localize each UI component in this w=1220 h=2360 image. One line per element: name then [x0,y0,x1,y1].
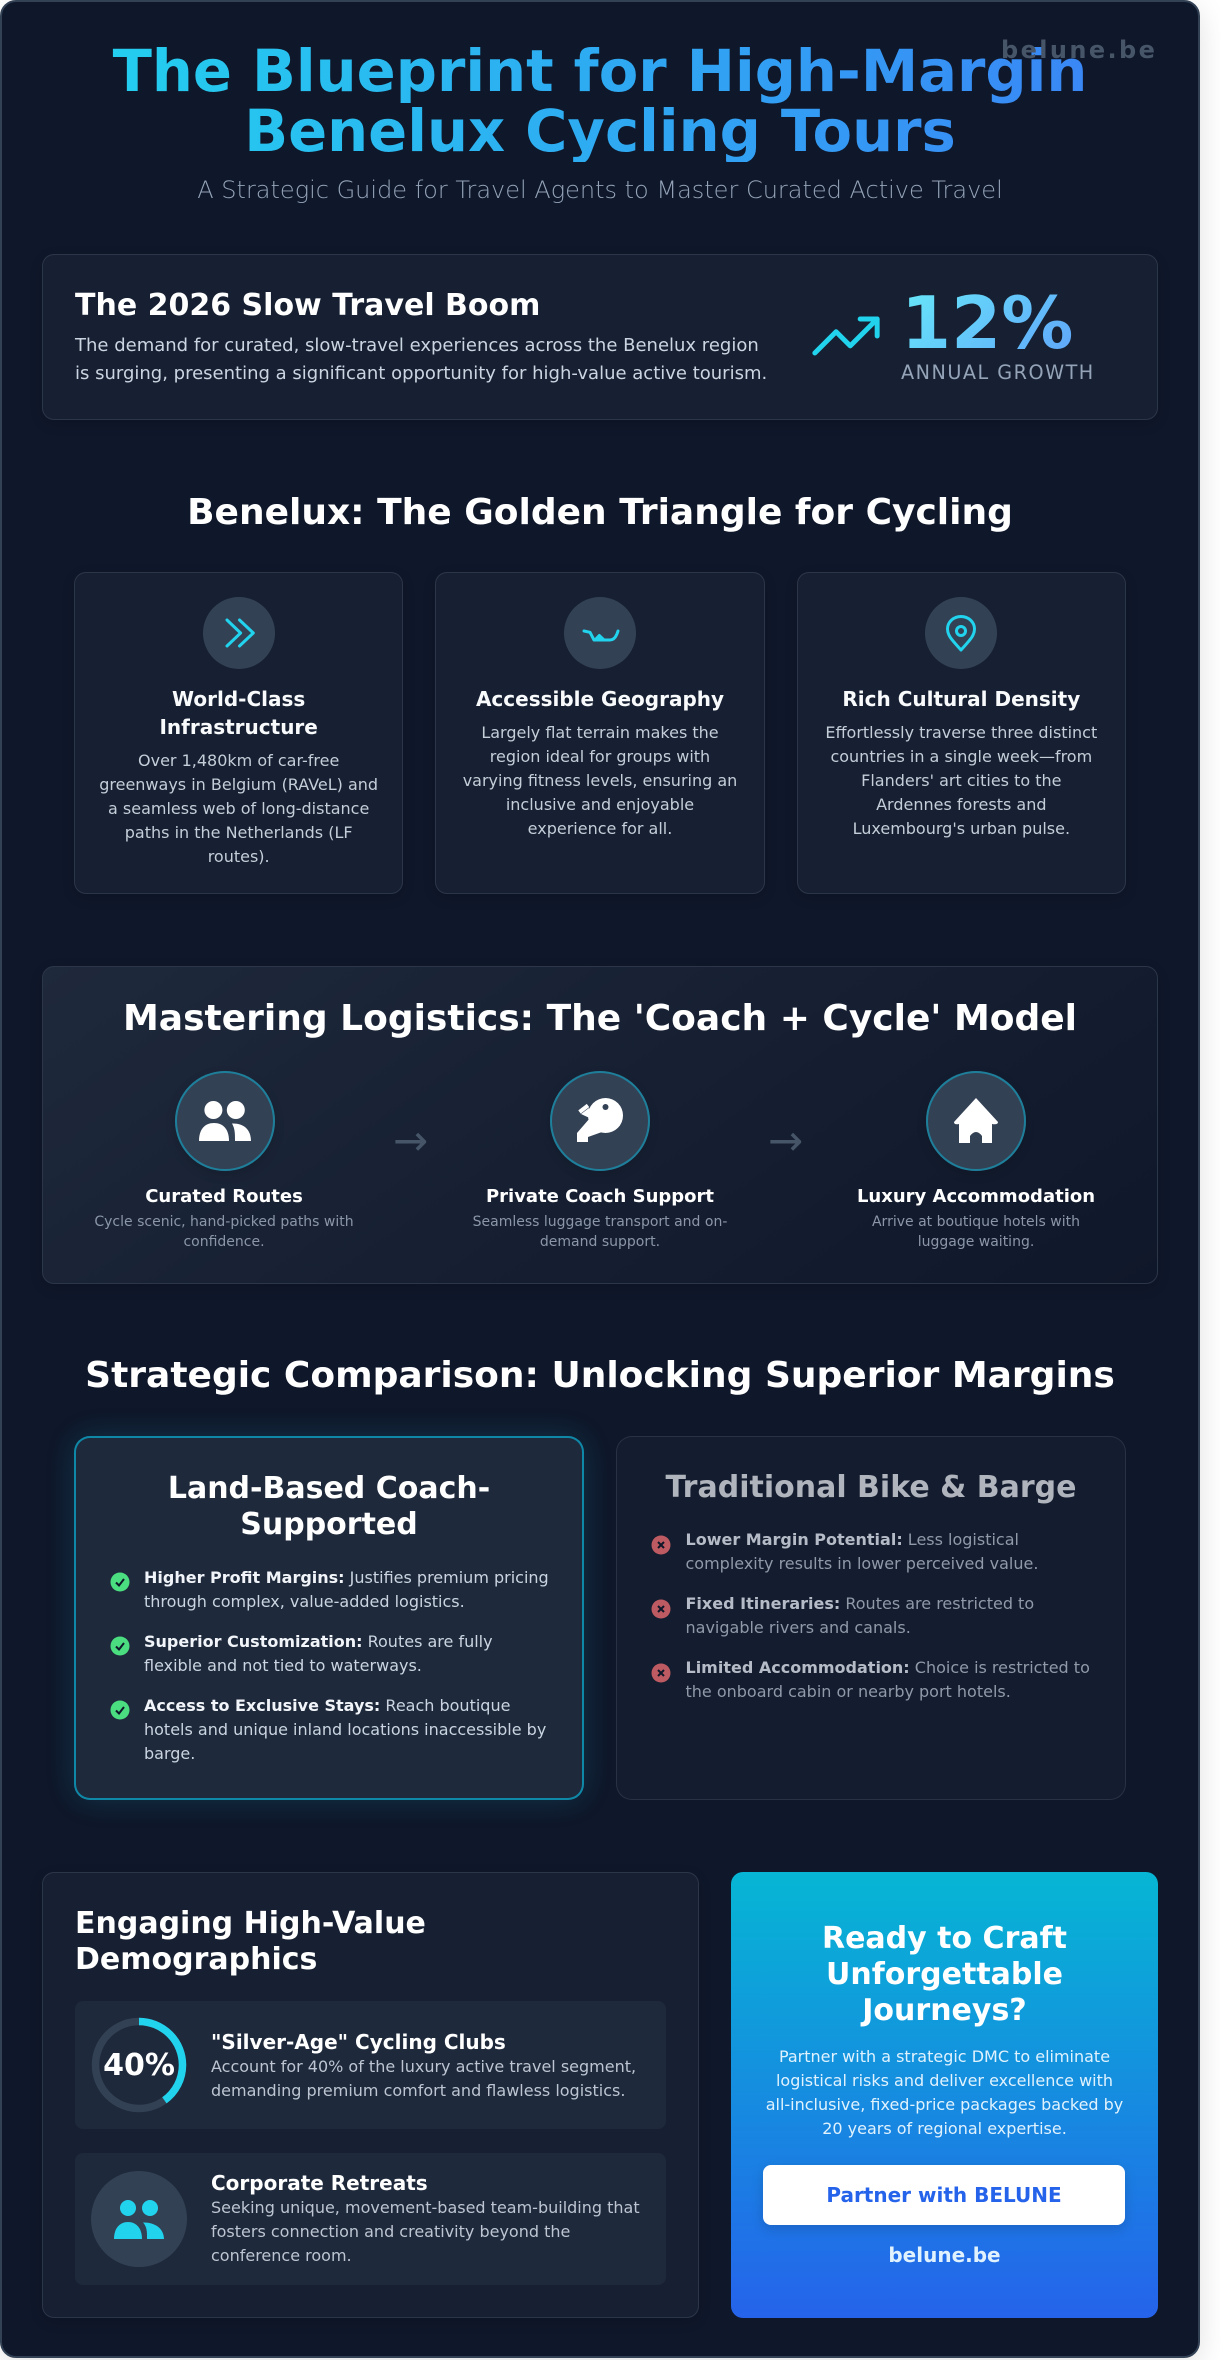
item: lower margin potential: complexity results in lower perceived value. [686,1554,1038,1573]
card title: Infrastructure [159,715,318,739]
title [42,42,1158,162]
stat label: ANNUAL GROWTH [901,361,1095,384]
item: superior customization [144,1632,493,1675]
arrow: → [768,1116,803,1165]
item: corporate retreats [75,2153,666,2285]
icon: check [110,1700,130,1720]
text: demand description [74,335,767,384]
card text: Ardennes forests and [876,795,1047,814]
card text: Over 1,480km of car-free [138,751,339,770]
button: partner with belune: Partner with BELUNE [826,2183,1062,2207]
panel: demographics [42,1872,699,2318]
step: luxury accommodation: Luxury Accommodation [857,1186,1095,1207]
cta text: all-inclusive, fixed-price packages backed by [766,2095,1123,2114]
icon: cross [652,1600,670,1618]
card title: Rich Cultural Density [842,687,1080,711]
icon: cross [652,1664,670,1682]
icon: trending up arrow [812,316,880,356]
title: Benelux Cycling Tours [244,98,956,165]
arrow: → [393,1116,428,1165]
icon: curated routes [175,1071,275,1171]
step: curated routes: Cycle scenic, hand-picked paths with [94,1214,354,1230]
item text: Seeking unique, movement-based team-building that [211,2198,640,2217]
item: fixed itineraries [686,1594,1034,1637]
card text: routes). [208,847,270,866]
item: lower margin potential: Lower Margin Potential: Less logistical [686,1530,1019,1549]
card text [825,723,1097,838]
cta heading: Unforgettable [826,1957,1063,1992]
website link: belune.be [888,2243,1001,2267]
cta text: logistical risks and deliver excellence with [776,2071,1113,2090]
card text: region ideal for groups with [490,747,710,766]
card text [463,723,737,838]
panel: slow travel boom [42,254,1158,420]
stat: 12 percent: 12% [901,281,1073,365]
icon: coach key [550,1071,650,1171]
icon: chevrons [203,597,275,669]
item text: Account for 40% of the luxury active travel segment, [211,2057,636,2076]
card title [159,687,318,739]
card text: inclusive and enjoyable [506,795,694,814]
step: luxury accommodation [857,1186,1095,1250]
title: The Blueprint for High-Margin [113,38,1087,105]
card title: Accessible Geography [476,687,724,711]
cta text: 20 years of regional expertise. [822,2119,1067,2138]
item: limited accommodation: Limited Accommodation: Choice is restricted to [686,1658,1090,1677]
item text [211,2198,640,2265]
cta heading [822,1921,1067,2028]
option title [168,1471,490,1542]
item: fixed itineraries: navigable rivers and canals. [686,1618,911,1637]
card text: Effortlessly traverse three distinct [825,723,1097,742]
text: demand description: is surging, presenting a significant opportunity for high-value active tourism. [75,363,767,384]
option title: Land-Based Coach- [168,1471,490,1506]
heading: strategic comparison: Strategic Comparison: Unlocking Superior Margins [85,1355,1115,1396]
option title: Supported [240,1507,418,1542]
step: private coach support: demand support. [540,1234,660,1250]
cta heading: Journeys? [862,1993,1027,2028]
text: demand description: The demand for curated, slow-travel experiences across the Benelux region [75,335,759,356]
cta text [766,2047,1123,2138]
card title: World-Class [172,687,305,711]
heading: slow travel boom: The 2026 Slow Travel Boom [75,288,540,323]
icon: team [91,2171,187,2267]
heading: demographics: Demographics [75,1942,317,1977]
item: exclusive stays: Access to Exclusive Stays: Reach boutique [144,1696,510,1715]
item text: conference room. [211,2246,352,2265]
item title: "Silver-Age" Cycling Clubs [211,2030,506,2054]
item title: Corporate Retreats [211,2171,428,2195]
item: exclusive stays: barge. [144,1744,195,1763]
card text [99,751,378,866]
panel: world-class infrastructure [74,572,403,894]
subtitle: A Strategic Guide for Travel Agents to Master Curated Active Travel [197,176,1003,204]
icon: cross [652,1536,670,1554]
item: exclusive stays [144,1696,546,1763]
item: higher profit margins: through complex, value-added logistics. [144,1592,465,1611]
item text: demanding premium comfort and flawless logistics. [211,2081,625,2100]
icon: check [110,1636,130,1656]
icon: check [110,1572,130,1592]
step: private coach support: Private Coach Support [486,1186,714,1207]
item: fixed itineraries: Fixed Itineraries: Routes are restricted to [686,1594,1034,1613]
step: luxury accommodation: Arrive at boutique hotels with [872,1214,1080,1230]
icon: map pin [925,597,997,669]
cta text: Partner with a strategic DMC to eliminate [779,2047,1110,2066]
watermark brand: belune.be [1001,36,1157,64]
panel: call to action [731,1872,1158,2318]
item: higher profit margins [144,1568,549,1611]
cta heading: Ready to Craft [822,1921,1067,1956]
panel: logistics model [42,966,1158,1284]
card text: a seamless web of long-distance [108,799,369,818]
item: higher profit margins: Higher Profit Margins: Justifies premium pricing [144,1568,549,1587]
chart: 40 percent ring [92,2018,186,2112]
item: exclusive stays: hotels and unique inland locations inaccessible by [144,1720,546,1739]
heading: demographics: Engaging High-Value [75,1906,426,1941]
item: superior customization: Superior Customization: Routes are fully [144,1632,493,1651]
panel: traditional bike and barge [616,1436,1126,1800]
step: curated routes [94,1186,354,1250]
heading: golden triangle: Benelux: The Golden Triangle for Cycling [187,492,1013,533]
step: curated routes: confidence. [183,1234,265,1250]
card text: Luxembourg's urban pulse. [853,819,1070,838]
card text: paths in the Netherlands (LF [125,823,353,842]
item: limited accommodation [686,1658,1090,1701]
panel: land-based coach-supported [74,1436,584,1800]
card text: Flanders' art cities to the [861,771,1062,790]
icon: home [926,1071,1026,1171]
panel: rich cultural density [797,572,1126,894]
item text: fosters connection and creativity beyond the [211,2222,570,2241]
button: partner with belune [763,2165,1125,2225]
item: lower margin potential [686,1530,1038,1573]
item text [211,2057,636,2100]
panel: accessible geography [435,572,765,894]
option title: Traditional Bike & Barge [666,1470,1076,1505]
card text: varying fitness levels, ensuring an [463,771,737,790]
step: curated routes: Curated Routes [145,1186,303,1207]
item: superior customization: flexible and not tied to waterways. [144,1656,422,1675]
card text: Largely flat terrain makes the [481,723,719,742]
heading: demographics [75,1906,426,1977]
card text: experience for all. [528,819,672,838]
card text: countries in a single week—from [830,747,1092,766]
icon: flat terrain [564,597,636,669]
chart: 40 percent ring: 40% [103,2048,175,2083]
heading: logistics: Mastering Logistics: The 'Coach + Cycle' Model [123,998,1077,1039]
step: private coach support: Seamless luggage transport and on- [473,1214,727,1230]
item: silver-age cycling clubs [75,2001,666,2129]
card text: greenways in Belgium (RAVeL) and [99,775,378,794]
item: limited accommodation: the onboard cabin or nearby port hotels. [686,1682,1011,1701]
step: luxury accommodation: luggage waiting. [918,1234,1034,1250]
step: private coach support [473,1186,727,1250]
